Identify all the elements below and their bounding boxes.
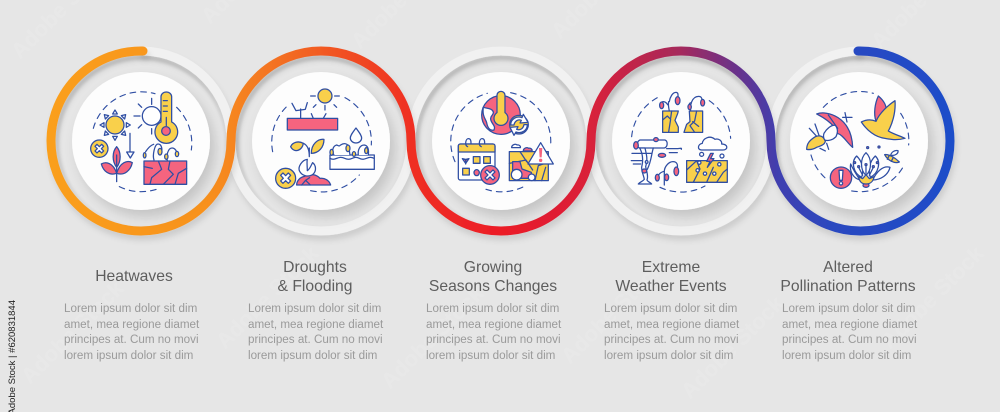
light track segments	[143, 51, 858, 231]
heading: Extreme Weather Events: Weather Events	[615, 278, 727, 295]
text: Extreme Weather description: principes at. Cum no movi	[604, 333, 739, 346]
watermark: Adobe Stock	[16, 275, 129, 389]
text: Extreme Weather description: amet, mea regione diamet	[604, 318, 740, 331]
text: Extreme Weather description: Lorem ipsum dolor sit dim	[604, 302, 737, 315]
icon: altered pollination patterns	[807, 91, 909, 192]
text: Droughts description: amet, mea regione diamet	[248, 318, 384, 331]
panel discs	[72, 72, 928, 210]
icon: droughts and flooding	[272, 89, 374, 192]
icon: extreme weather events	[631, 92, 731, 192]
text: Heatwaves description: lorem ipsum dolor sit dim	[64, 349, 193, 362]
heading: Growing Seasons Changes: Seasons Changes	[429, 278, 557, 295]
heading: Altered Pollination Patterns: Altered	[823, 259, 873, 276]
text: Extreme Weather description: lorem ipsum dolor sit dim	[604, 349, 733, 362]
inner ring shadows	[58, 58, 945, 228]
heading: Droughts and Flooding: & Flooding	[278, 278, 352, 295]
watermark: Adobe Stock	[876, 240, 989, 354]
watermark: Adobe Stock	[676, 290, 789, 404]
watermark: Adobe Stock	[376, 280, 489, 394]
text: Droughts description: principes at. Cum no movi	[248, 333, 383, 346]
text: Growing Seasons description: amet, mea regione diamet	[426, 318, 562, 331]
watermark: Adobe Stock	[211, 240, 324, 354]
text: Altered Pollination description: principes at. Cum no movi	[782, 333, 917, 346]
icon: growing seasons changes	[451, 91, 553, 192]
text: Heatwaves description: principes at. Cum no movi	[64, 333, 199, 346]
watermark: Adobe Stock	[556, 255, 669, 369]
heading: Altered Pollination Patterns: Pollination Patterns	[780, 278, 916, 295]
heading: Growing Seasons Changes: Growing	[464, 259, 522, 276]
text: Droughts description: Lorem ipsum dolor sit dim	[248, 302, 381, 315]
icon: heatwaves	[91, 92, 192, 192]
heading: Heatwaves: Heatwaves	[95, 268, 173, 285]
text: Growing Seasons description: principes at. Cum no movi	[426, 333, 561, 346]
text: Altered Pollination description: lorem ipsum dolor sit dim	[782, 349, 911, 362]
stock id label: Adobe Stock | #620831844	[7, 300, 18, 412]
text: Growing Seasons description: lorem ipsum dolor sit dim	[426, 349, 555, 362]
heading: Droughts and Flooding: Droughts	[283, 259, 347, 276]
heading: Extreme Weather Events: Extreme	[642, 259, 700, 276]
text: Growing Seasons description: Lorem ipsum dolor sit dim	[426, 302, 559, 315]
text: Droughts description: lorem ipsum dolor sit dim	[248, 349, 377, 362]
serpentine coloured ribbon	[51, 51, 950, 231]
text: Heatwaves description: amet, mea regione diamet	[64, 318, 200, 331]
text: Altered Pollination description: Lorem ipsum dolor sit dim	[782, 302, 915, 315]
text: Heatwaves description: Lorem ipsum dolor sit dim	[64, 302, 197, 315]
text: Altered Pollination description: amet, mea regione diamet	[782, 318, 918, 331]
